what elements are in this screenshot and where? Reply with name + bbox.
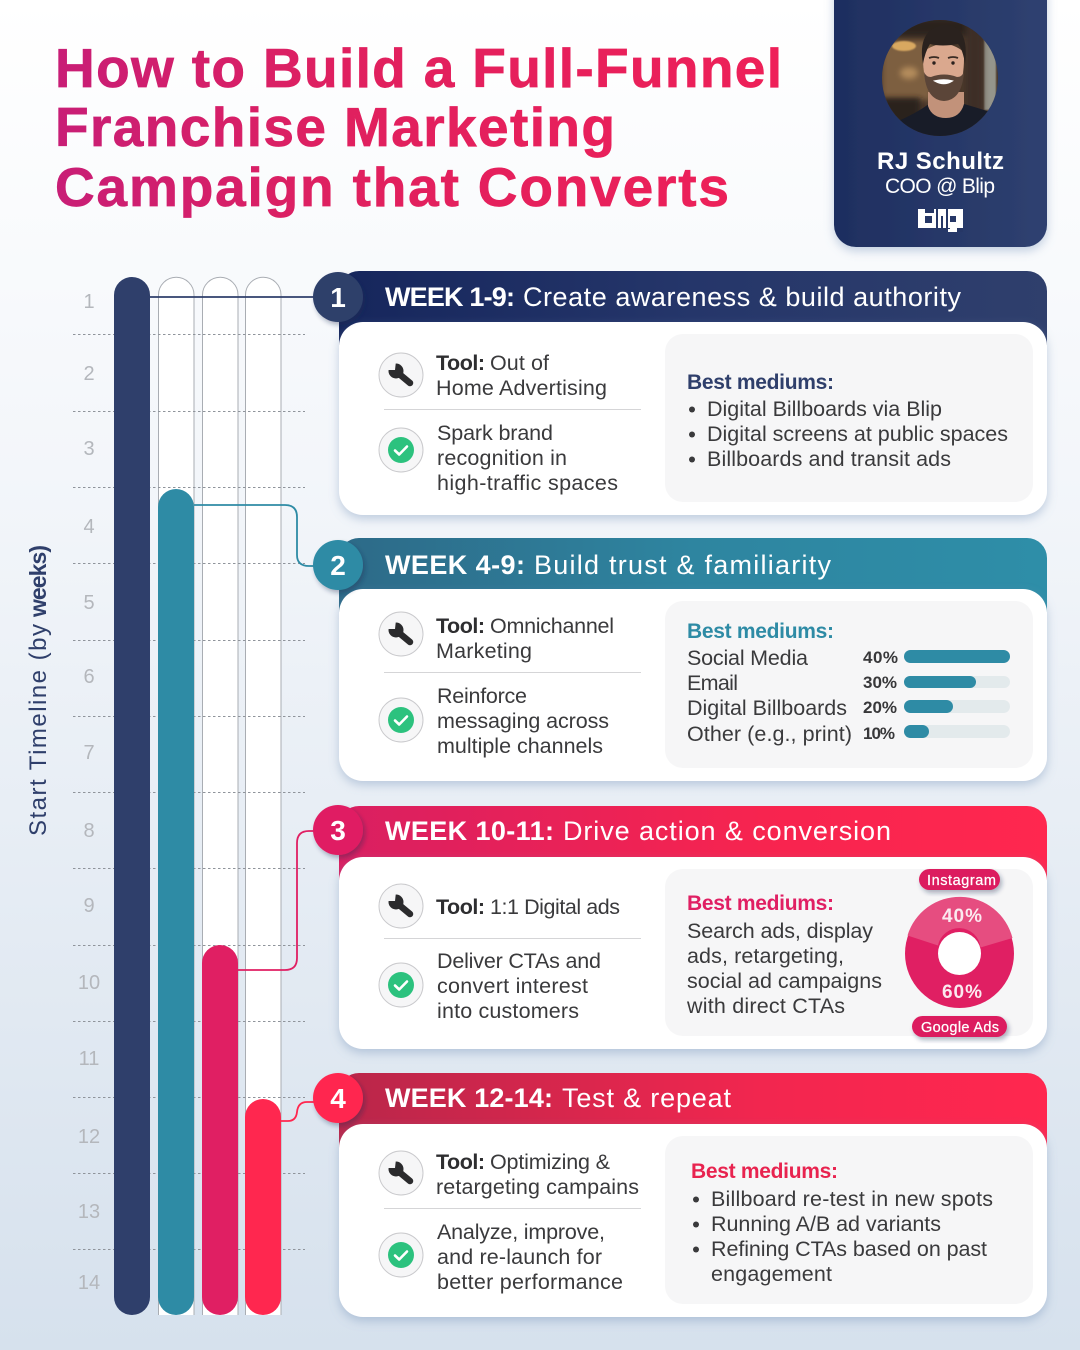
best mediums box xyxy=(665,334,1033,502)
heading: WEEK 10-11: xyxy=(385,816,554,846)
timeline week numbers: 7 xyxy=(83,742,95,764)
goal text: better performance xyxy=(437,1270,623,1294)
panel: week 4-9 xyxy=(313,538,1047,781)
author name: RJ Schultz xyxy=(877,148,1004,175)
panel header xyxy=(339,538,1047,612)
donut chart: 60% xyxy=(942,982,982,1003)
tool text: Optimizing & xyxy=(490,1150,610,1174)
number badge xyxy=(313,272,363,322)
best mediums box with bar chart: Digital Billboards xyxy=(687,696,847,720)
icon: check xyxy=(379,1233,423,1277)
best mediums box with bar chart: Social Media xyxy=(687,646,808,670)
tool text: Home Advertising xyxy=(436,376,607,400)
tool text: Marketing xyxy=(436,639,532,663)
timeline empty tracks xyxy=(158,277,281,1315)
panel card xyxy=(339,857,1047,1049)
goal text xyxy=(437,949,601,1023)
goal text xyxy=(437,421,618,495)
goal text: recognition in xyxy=(437,446,567,470)
goal text: Spark brand xyxy=(437,421,553,445)
best mediums box with donut chart: ads, retargeting, xyxy=(687,944,844,968)
goal text xyxy=(437,1220,623,1294)
tool text xyxy=(436,351,607,400)
title: Franchise Marketing xyxy=(55,96,615,158)
panel card xyxy=(339,1124,1047,1317)
icon: wrench xyxy=(379,353,423,397)
number badge: 1 xyxy=(330,282,346,313)
number badge: 2 xyxy=(330,550,346,581)
panel card xyxy=(339,322,1047,515)
heading: WEEK 4-9: xyxy=(385,550,525,580)
timeline week numbers: 12 xyxy=(78,1126,100,1148)
panel header xyxy=(339,271,1047,345)
panel card xyxy=(339,589,1047,781)
goal text: and re-launch for xyxy=(437,1245,602,1269)
panel header xyxy=(339,1073,1047,1148)
best mediums box with bar chart: 20% xyxy=(863,698,897,717)
arrow: connector 1 xyxy=(150,296,320,298)
icon: check xyxy=(379,698,423,742)
timeline week numbers: 9 xyxy=(83,895,95,917)
heading: WEEK 1-9: xyxy=(385,282,515,312)
heading: Drive action & conversion xyxy=(563,816,891,846)
best mediums box with donut chart: with direct CTAs xyxy=(686,994,845,1018)
best mediums box with donut chart xyxy=(665,869,1033,1037)
arrow: connector 2 xyxy=(194,505,320,566)
donut chart: 40% xyxy=(942,906,982,927)
timeline week numbers: 14 xyxy=(78,1272,100,1294)
timeline bar: week 12-14 xyxy=(245,1099,281,1315)
arrow: connector 4 xyxy=(281,1102,320,1121)
best mediums box xyxy=(665,1136,1033,1304)
timeline bar: week 10-11 xyxy=(202,945,238,1315)
best mediums box with donut chart: Search ads, display xyxy=(687,919,873,943)
best mediums box: Best mediums: xyxy=(687,371,834,394)
timeline week numbers: 13 xyxy=(78,1201,100,1223)
tool text: 1:1 Digital ads xyxy=(490,895,620,919)
tool text: Tool: xyxy=(436,1150,485,1174)
panel: week 1-9 xyxy=(313,271,1047,515)
tool text: Tool: xyxy=(436,895,485,919)
axis label: weeks) xyxy=(25,545,51,618)
goal text: multiple channels xyxy=(437,734,603,758)
timeline week numbers: 10 xyxy=(78,972,100,994)
best mediums box: engagement xyxy=(711,1262,832,1286)
number badge xyxy=(313,540,363,590)
arrow: connector 3 xyxy=(238,831,320,970)
tool text: Tool: xyxy=(436,614,485,638)
number badge xyxy=(313,805,363,855)
timeline week numbers: 2 xyxy=(83,363,95,385)
timeline bar: week 1-9 xyxy=(114,277,150,1315)
timeline week numbers: 5 xyxy=(83,592,95,614)
goal text: Reinforce xyxy=(437,684,527,708)
donut chart xyxy=(905,897,1014,1008)
best mediums box: Refining CTAs based on past xyxy=(711,1237,987,1261)
best mediums box: Running A/B ad variants xyxy=(711,1212,941,1236)
best mediums box with bar chart: Best mediums: xyxy=(687,620,834,643)
number badge xyxy=(313,1073,363,1123)
goal text: convert interest xyxy=(437,974,588,998)
label: Google Ads: Google Ads xyxy=(921,1020,999,1036)
goal text: messaging across xyxy=(437,709,609,733)
author role: COO @ Blip xyxy=(885,175,995,198)
tool text: retargeting campains xyxy=(436,1175,639,1199)
heading: Test & repeat xyxy=(562,1083,731,1113)
goal text: Analyze, improve, xyxy=(437,1220,605,1244)
tool text xyxy=(436,614,614,663)
title xyxy=(55,37,782,218)
title: How to Build a Full-Funnel xyxy=(55,37,782,99)
panel: week 12-14 xyxy=(313,1073,1047,1317)
number badge: 3 xyxy=(330,815,346,846)
best mediums box: Billboards and transit ads xyxy=(707,447,951,471)
best mediums box: Digital screens at public spaces xyxy=(707,422,1008,446)
number badge: 4 xyxy=(330,1083,346,1114)
heading xyxy=(385,816,891,846)
icon: author portrait xyxy=(880,18,1000,138)
timeline week numbers: 6 xyxy=(83,666,95,688)
heading: Build trust & familiarity xyxy=(534,550,832,580)
label: Instagram: Instagram xyxy=(927,873,996,889)
best mediums box with bar chart: 40% xyxy=(863,648,898,667)
title: Campaign that Converts xyxy=(55,156,729,218)
panel: author profile xyxy=(834,0,1047,247)
label: Google Ads xyxy=(912,1016,1007,1037)
timeline week numbers: 11 xyxy=(79,1048,99,1070)
heading: WEEK 12-14: xyxy=(385,1083,553,1113)
tool text: Out of xyxy=(490,351,549,375)
best mediums box: Digital Billboards via Blip xyxy=(707,397,942,421)
best mediums box with bar chart: Other (e.g., print) xyxy=(687,722,852,746)
goal text: Deliver CTAs and xyxy=(437,949,601,973)
best mediums box with bar chart: 30% xyxy=(863,673,897,692)
goal text: high-traffic spaces xyxy=(437,471,618,495)
timeline bar: week 4-9 xyxy=(158,489,194,1315)
best mediums box with donut chart: Best mediums: xyxy=(687,892,834,915)
bar chart xyxy=(904,650,1010,738)
timeline week numbers: 4 xyxy=(83,516,95,538)
heading xyxy=(385,1083,731,1113)
icon: blip logo: blip xyxy=(920,209,961,231)
timeline week numbers: 1 xyxy=(83,291,95,313)
tool text: Tool: xyxy=(436,351,485,375)
goal text xyxy=(437,684,609,758)
best mediums box: Billboard re-test in new spots xyxy=(711,1187,993,1211)
label: Instagram xyxy=(919,869,1000,890)
heading xyxy=(385,550,832,580)
timeline week numbers: 3 xyxy=(83,438,95,460)
icon: check xyxy=(379,963,423,1007)
best mediums box with bar chart: 10% xyxy=(863,724,895,743)
icon: check xyxy=(379,428,423,472)
tool text: Omnichannel xyxy=(490,614,614,638)
icon: wrench xyxy=(379,1151,423,1195)
heading: Create awareness & build authority xyxy=(523,282,962,312)
icon: wrench xyxy=(379,612,423,656)
tool text xyxy=(436,1150,639,1199)
panel header xyxy=(339,806,1047,880)
timeline week numbers xyxy=(78,291,100,1294)
best mediums box with bar chart: Email xyxy=(687,671,738,695)
best mediums box with bar chart xyxy=(665,601,1033,768)
axis label: Start Timeline (by xyxy=(25,624,52,836)
best mediums box with donut chart: social ad campaigns xyxy=(687,969,882,993)
goal text: into customers xyxy=(437,999,579,1023)
icon: wrench xyxy=(379,884,423,928)
timeline week numbers: 8 xyxy=(83,820,95,842)
panel: week 10-11 xyxy=(313,805,1047,1049)
best mediums box: Best mediums: xyxy=(691,1160,838,1183)
